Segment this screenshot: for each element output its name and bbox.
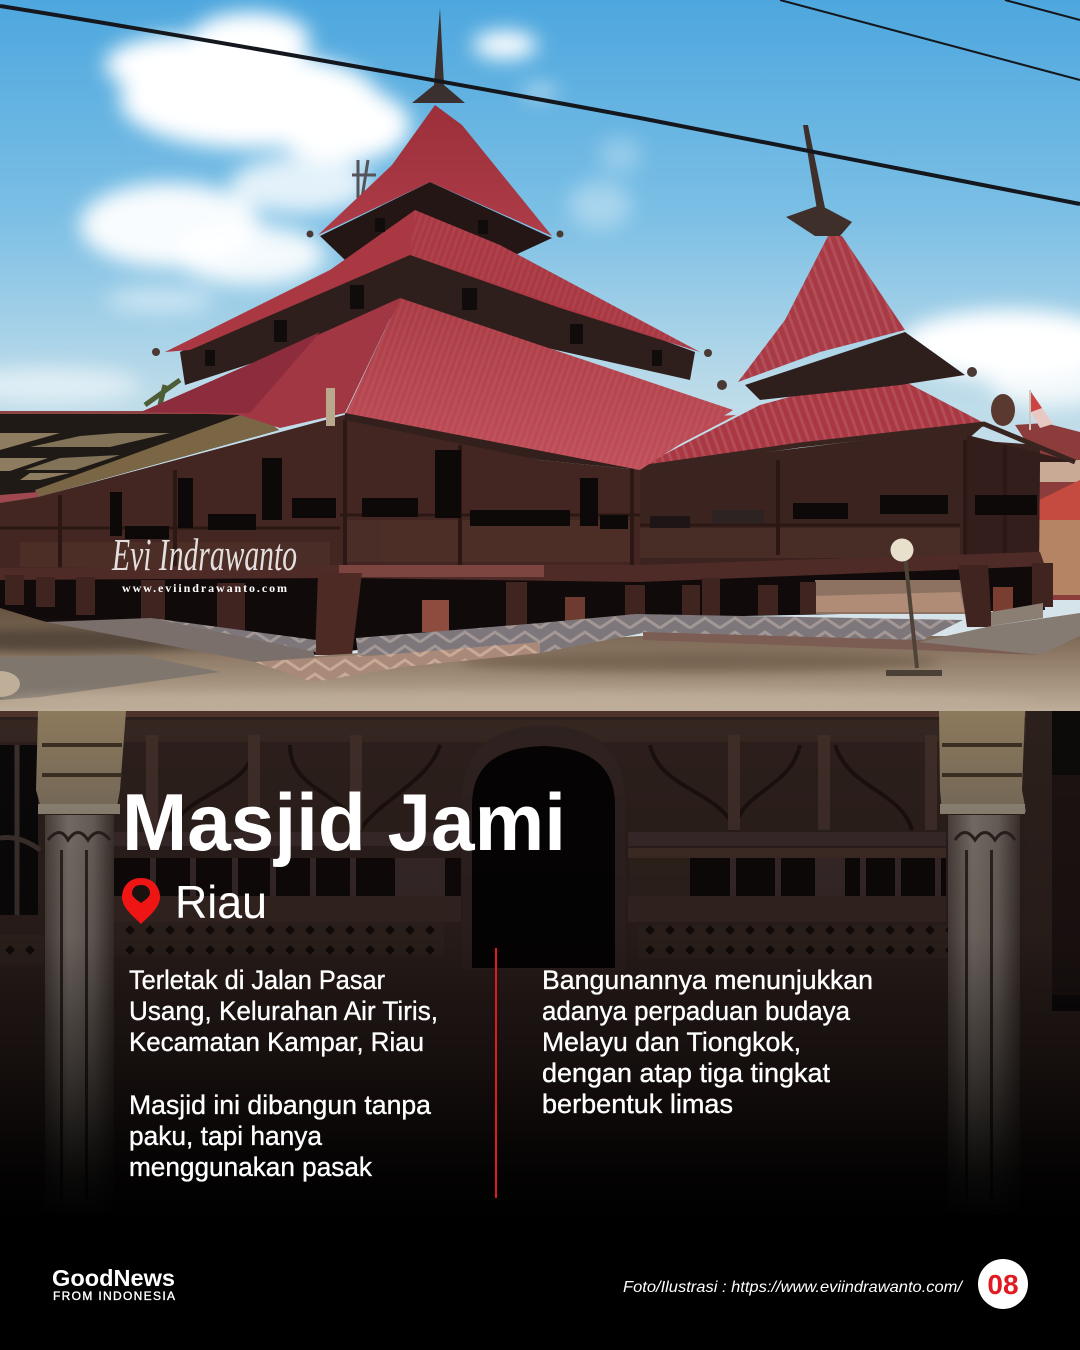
icon: location pin xyxy=(122,878,160,924)
text block: location description: Usang, Kelurahan Air Tiris, xyxy=(129,996,438,1026)
window rows xyxy=(114,832,461,846)
text block: construction description: paku, tapi hanya xyxy=(129,1121,323,1151)
windows xyxy=(110,450,1037,539)
red divider xyxy=(495,948,497,1198)
right column xyxy=(939,711,1026,1215)
eave ornaments xyxy=(152,230,1015,426)
platform xyxy=(46,603,1080,682)
text block: architecture description: berbentuk limas xyxy=(542,1089,733,1119)
floor beam xyxy=(0,552,1045,582)
location label: Riau xyxy=(175,876,267,928)
logo: GoodNews from Indonesia xyxy=(52,1265,175,1303)
text block: location description: Terletak di Jalan Pasar xyxy=(129,965,385,995)
main walls xyxy=(0,415,640,577)
text block: construction description: Masjid ini dibangun tanpa xyxy=(129,1090,432,1120)
left column xyxy=(36,711,126,1215)
right upper roof xyxy=(738,236,905,382)
photo credit: Foto/Ilustrasi : https://www.eviindrawanto.com/ xyxy=(623,1279,964,1296)
left window xyxy=(0,745,40,915)
text block: construction description xyxy=(129,1090,432,1182)
backing dark structure xyxy=(180,245,695,385)
text block: construction description: menggunakan pasak xyxy=(129,1152,372,1182)
clouds xyxy=(0,12,1080,407)
finial xyxy=(412,8,465,103)
logo: GoodNews from Indonesia: FROM INDONESIA xyxy=(53,1289,175,1303)
text block: architecture description xyxy=(542,965,873,1119)
roof vents xyxy=(205,218,662,366)
title: Masjid Jami xyxy=(122,778,566,868)
text block: location description xyxy=(129,965,438,1057)
underfloor xyxy=(0,565,1045,655)
watermark xyxy=(111,529,297,595)
antenna xyxy=(352,160,376,198)
arch doorway xyxy=(462,725,625,970)
right lower roof xyxy=(638,415,736,465)
stilts xyxy=(5,563,1053,655)
watermark: www.eviindrawanto.com xyxy=(122,581,287,595)
lamp post xyxy=(886,538,942,676)
logo: GoodNews from Indonesia: GoodNews xyxy=(52,1265,175,1291)
text block: architecture description: Melayu dan Tiongkok, xyxy=(542,1027,801,1057)
photo: mosque interior background xyxy=(0,711,1080,1350)
middle roof xyxy=(165,210,700,352)
carved panels xyxy=(170,745,912,830)
right finial xyxy=(786,125,852,236)
right edge xyxy=(1052,711,1080,1011)
top roof xyxy=(318,105,552,236)
text block: location description: Kecamatan Kampar, Riau xyxy=(129,1027,424,1057)
lower main roof xyxy=(141,298,400,428)
ground xyxy=(0,608,1080,711)
photo: mosque exterior xyxy=(0,0,1080,711)
watermark: Evi Indrawanto xyxy=(111,529,297,580)
canopy roof xyxy=(0,411,279,503)
text block: architecture description: adanya perpaduan budaya xyxy=(542,996,851,1026)
text block: architecture description: dengan atap tiga tingkat xyxy=(542,1058,830,1088)
lattice bands xyxy=(114,922,444,955)
palm xyxy=(145,380,180,405)
power lines xyxy=(0,0,1080,204)
wall posts xyxy=(60,420,1005,570)
flag xyxy=(1030,390,1053,430)
lower wall panels xyxy=(0,515,960,528)
right tier band xyxy=(745,332,965,400)
distant building xyxy=(1015,423,1080,600)
text block: architecture description: Bangunannya menunjukkan xyxy=(542,965,873,995)
page number badge xyxy=(978,1259,1028,1309)
page number badge: 08 xyxy=(987,1269,1019,1300)
